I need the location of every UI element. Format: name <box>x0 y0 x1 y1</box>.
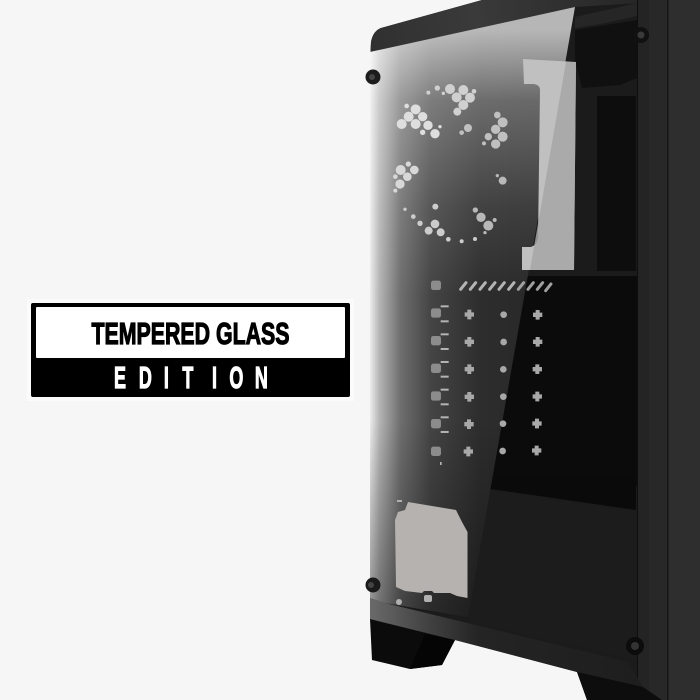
badge black frame <box>31 303 350 397</box>
blade hole cluster: lower left <box>393 161 419 193</box>
reflection gradients <box>370 7 575 617</box>
fan cut-out holes <box>393 84 508 243</box>
slotted vent row <box>461 283 551 291</box>
left foot <box>370 619 455 669</box>
badge white field <box>36 307 345 358</box>
screw bottom right <box>626 637 644 655</box>
glass screws <box>366 27 649 655</box>
front panel <box>637 0 700 700</box>
badge halo <box>27 299 354 401</box>
blade hole cluster: top <box>426 84 476 116</box>
screw top left <box>366 70 380 84</box>
blade hole cluster: lower right <box>473 174 507 234</box>
badge: Tempered Glass Edition <box>27 299 354 401</box>
bracket reflection <box>530 62 576 270</box>
glass panel <box>370 7 575 617</box>
cross holes column 1 <box>464 310 474 456</box>
computer case <box>370 0 700 700</box>
round holes column 2 <box>499 311 507 454</box>
cable routing cut-outs <box>431 281 441 456</box>
blade hole cluster: right <box>459 112 508 149</box>
right foot <box>577 672 662 700</box>
cable tie slots <box>440 305 449 465</box>
screw top right <box>633 27 649 43</box>
heading: tempered glass: TEMPERED GLASS <box>92 316 290 351</box>
interior back panel <box>470 3 637 486</box>
PSU small holes <box>396 500 432 605</box>
blade hole cluster: left <box>397 104 442 138</box>
power supply shroud <box>390 477 637 660</box>
screw bottom left <box>366 578 380 592</box>
bottom strip <box>370 598 643 687</box>
case body <box>370 0 700 700</box>
blade hole cluster: bottom <box>403 204 477 243</box>
bracket cut-out <box>522 59 576 270</box>
top panel <box>370 0 640 52</box>
interior seen through glass <box>370 7 575 617</box>
PSU cut-out <box>395 502 468 598</box>
motherboard standoff holes <box>431 281 542 465</box>
cross holes column 3 <box>532 310 542 455</box>
subheading: edition: EDITION <box>114 361 268 395</box>
